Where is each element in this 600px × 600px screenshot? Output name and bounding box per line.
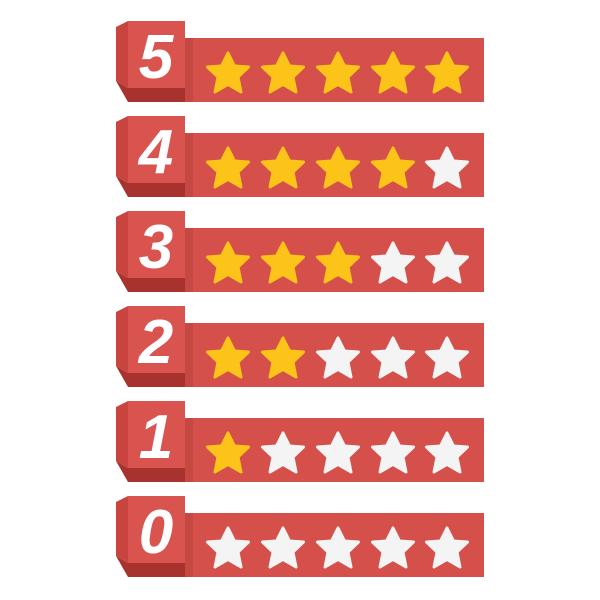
row: 4 stars — [116, 116, 484, 197]
label 5: 5 — [139, 23, 175, 92]
label 3: 3 — [139, 213, 173, 282]
row: 5 stars — [116, 21, 484, 102]
row: 1 star — [116, 401, 484, 482]
stars — [208, 338, 468, 377]
stars — [208, 148, 468, 187]
label 2: 2 — [138, 308, 173, 377]
label 0: 0 — [139, 498, 173, 567]
row: 2 stars — [116, 306, 484, 387]
stars — [208, 528, 468, 567]
label 1: 1 — [139, 403, 173, 472]
stars — [208, 53, 468, 92]
row: 3 stars — [116, 211, 484, 292]
stars — [208, 433, 468, 472]
stars — [208, 243, 468, 282]
label 4: 4 — [137, 118, 173, 187]
row: 0 stars — [116, 496, 484, 577]
